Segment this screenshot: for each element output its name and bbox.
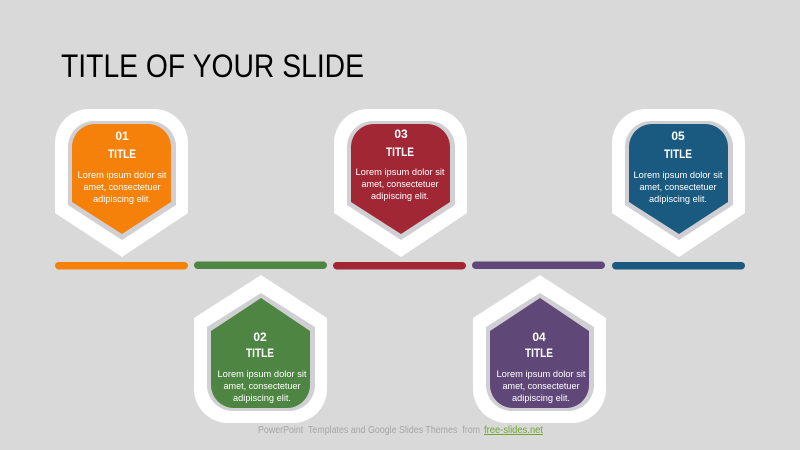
- panel: 02: [194, 275, 327, 423]
- panel: 01: 01: [115, 129, 129, 143]
- panel: 02: 02: [253, 330, 267, 344]
- panel: 02: adipiscing elit.: [233, 393, 291, 404]
- footer credit: PowerPoint Templates and Google Slides Themes from: [258, 425, 480, 436]
- panel: 03: Lorem ipsum dolor sit: [356, 167, 445, 178]
- panel: 04: TITLE: [525, 348, 553, 360]
- panel: 01: TITLE: [108, 149, 136, 161]
- panel: 01: [55, 109, 188, 257]
- panel: 04: Lorem ipsum dolor sit: [496, 369, 586, 380]
- panel: 05: TITLE: [664, 149, 692, 161]
- panel: 05: amet, consectetuer: [640, 182, 716, 193]
- panel: 01: adipiscing elit.: [93, 194, 151, 205]
- panel: 03: amet, consectetuer: [362, 179, 438, 190]
- panel: 03: 03: [394, 127, 408, 141]
- panel: 02: Lorem ipsum dolor sit: [218, 369, 307, 380]
- panel: 05: [612, 109, 745, 257]
- timeline bars: [55, 262, 745, 270]
- panel: 02: amet, consectetuer: [224, 381, 300, 392]
- panel: 01: Lorem ipsum dolor sit: [78, 170, 167, 181]
- panel: 04: adipiscing elit.: [512, 393, 570, 404]
- panel: 03: adipiscing elit.: [371, 191, 429, 202]
- title: TITLE OF YOUR SLIDE: [61, 48, 364, 84]
- panel: 04: amet, consectetuer: [502, 381, 580, 392]
- panel: 05: 05: [671, 129, 685, 143]
- panel: 04: 04: [532, 330, 546, 344]
- panel: 03: TITLE: [386, 147, 414, 159]
- panel: 03: [334, 109, 467, 257]
- panel: 02: TITLE: [246, 348, 274, 360]
- panel: 05: adipiscing elit.: [649, 194, 707, 205]
- panel: 04: [473, 275, 606, 423]
- footer credit: free-slides.net: [484, 425, 543, 436]
- panel: 05: Lorem ipsum dolor sit: [634, 170, 723, 181]
- panel: 01: amet, consectetuer: [84, 182, 160, 193]
